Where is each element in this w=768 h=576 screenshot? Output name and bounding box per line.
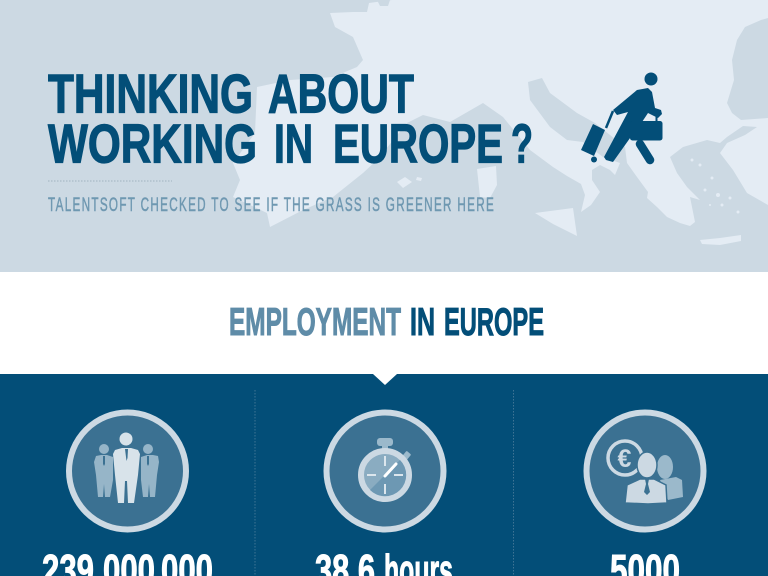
section heading: EMPLOYMENT <box>229 301 401 344</box>
title: THINKING <box>48 64 253 124</box>
icon: traveller with suitcase and briefcase <box>581 72 662 162</box>
section heading: EUROPE <box>444 301 544 344</box>
title: ABOUT <box>268 64 414 124</box>
title: ? <box>511 114 533 174</box>
title: WORKING <box>48 114 257 174</box>
icon: stopwatch <box>326 412 444 530</box>
stat: workforce <box>42 412 213 576</box>
icon: three business people <box>69 412 186 530</box>
icon: euro coin and two employees <box>586 412 704 530</box>
stat: salary <box>586 412 704 576</box>
panel: statistics <box>0 374 768 576</box>
title: IN <box>274 114 313 174</box>
stat: working hours <box>315 412 453 576</box>
title <box>48 64 533 174</box>
panel: header map <box>0 0 768 272</box>
icon: euro coin and two employees: € <box>618 445 632 473</box>
subtitle: TALENTSOFT CHECKED TO SEE IF THE GRASS IS GREENER HERE <box>48 194 494 216</box>
title: EUROPE <box>333 114 503 174</box>
section heading: IN <box>410 301 435 344</box>
value: 38.6 hours <box>315 546 453 576</box>
value: 239 000 000 <box>42 546 213 576</box>
